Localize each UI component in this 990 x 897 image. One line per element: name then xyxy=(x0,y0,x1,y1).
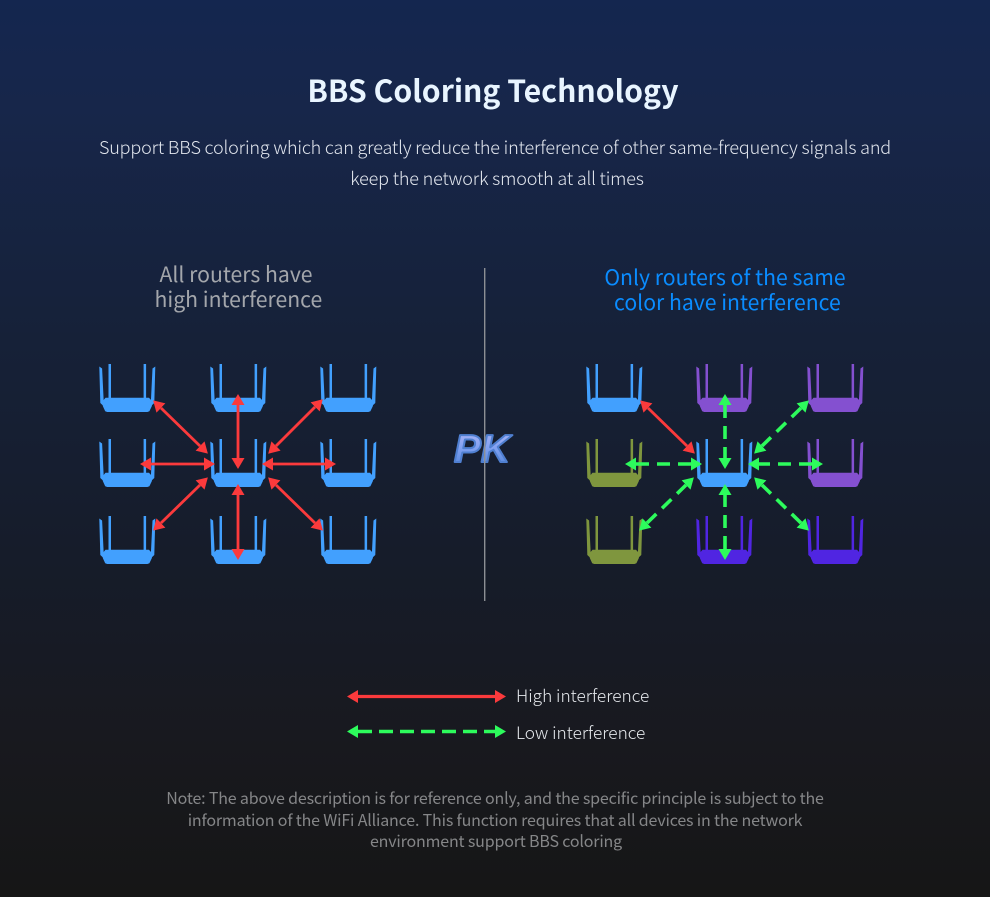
subtitle: Support BBS coloring which can greatly reduce the interference of other same-frequency signals and xyxy=(99,134,891,160)
legend low arrow xyxy=(358,730,495,733)
blue router xyxy=(586,364,642,412)
left heading: high interference xyxy=(154,283,322,314)
right red arrow xyxy=(648,408,687,446)
footnote: information of the WiFi Alliance. This function requires that all devices in the network xyxy=(188,806,802,830)
left heading: All routers have xyxy=(159,258,313,289)
olive router xyxy=(586,516,642,564)
left router grid xyxy=(99,364,376,564)
legend label high: High interference xyxy=(516,682,649,707)
footnote: Note: The above description is for reference only, and the specific principle is subject to the xyxy=(166,785,824,809)
right router grid xyxy=(586,364,863,564)
right heading: Only routers of the same xyxy=(604,261,846,292)
indigo router xyxy=(807,516,863,564)
router xyxy=(320,516,376,564)
router xyxy=(99,516,155,564)
router xyxy=(99,439,155,487)
right low-interference arrows xyxy=(636,405,812,549)
router xyxy=(210,364,266,412)
subtitle: keep the network smooth at all times xyxy=(350,165,644,191)
legend label low: Low interference xyxy=(516,719,645,744)
PK badge: PK xyxy=(454,428,513,471)
center blue router xyxy=(696,439,752,487)
purple router xyxy=(807,364,863,412)
right heading xyxy=(604,261,846,317)
subtitle xyxy=(99,134,891,191)
indigo router xyxy=(696,516,752,564)
divider line xyxy=(484,268,485,601)
router xyxy=(320,364,376,412)
legend high arrow xyxy=(358,695,495,698)
router xyxy=(99,364,155,412)
right heading: color have interference xyxy=(614,286,841,317)
router xyxy=(320,439,376,487)
router xyxy=(210,516,266,564)
left high-interference arrows xyxy=(151,405,325,549)
olive router xyxy=(586,439,642,487)
left heading xyxy=(154,258,322,314)
footnote xyxy=(166,785,824,852)
center router xyxy=(210,439,266,487)
purple router xyxy=(696,364,752,412)
footnote: environment support BBS coloring xyxy=(370,828,622,852)
title: BBS Coloring Technology xyxy=(307,67,679,111)
purple router xyxy=(807,439,863,487)
